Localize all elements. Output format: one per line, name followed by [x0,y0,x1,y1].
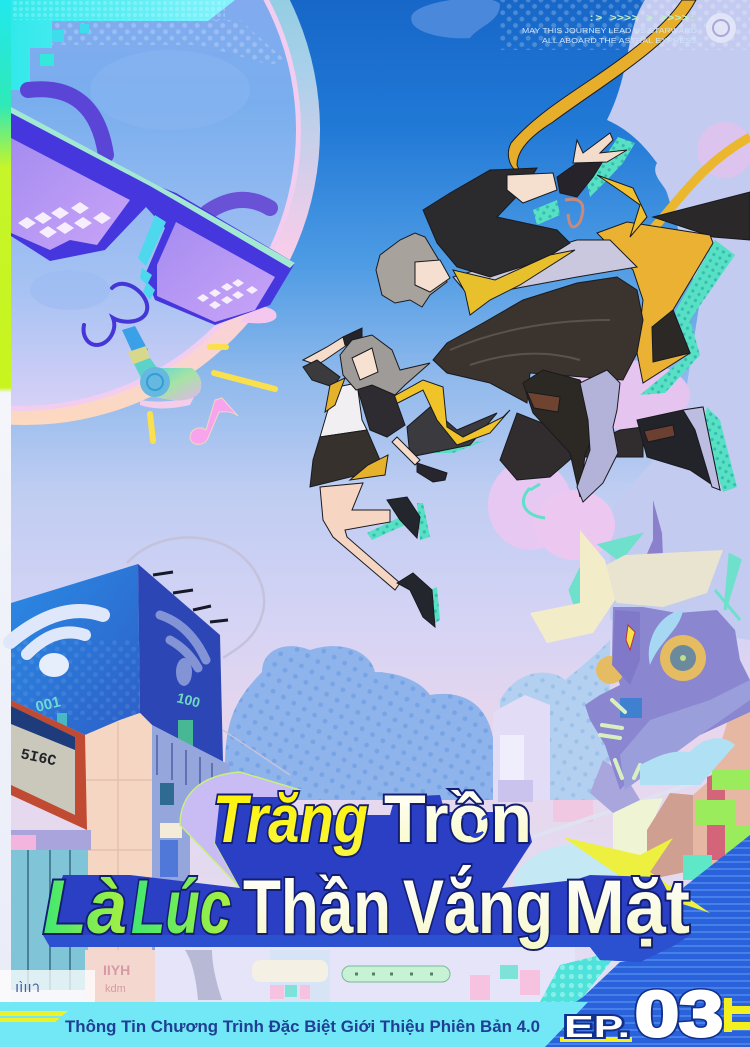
bottom-right blue panel [540,835,750,1047]
lower boot [397,573,435,627]
billboard [11,700,87,830]
pale green panel [613,798,663,880]
pixel squares [270,970,540,1000]
light blue hair [649,610,683,665]
dotted clouds [127,537,610,800]
motto line 2: ALL ABOARD THE ASTRAL EXPRESS [542,36,697,45]
glasses frame [11,108,295,325]
dragon snout [612,610,640,685]
wifi icon front [10,611,103,677]
title line 2 white [243,865,690,950]
hair and face [376,233,447,307]
raised arm [507,173,557,203]
top-right motto [522,13,736,45]
dragon body [585,607,750,790]
hair [340,335,430,395]
title line 2 white: Thần [243,865,391,950]
green bubble [342,966,450,982]
shirt [453,240,637,297]
motto line 1: MAY THIS JOURNEY LEAD US STARWARD [522,26,698,35]
lower-left shops: kdm [105,983,126,995]
pale cape right [597,550,723,607]
glove raised [343,328,362,345]
face on letter o [462,816,489,837]
character: female trailblazer [303,328,510,627]
billboard: 5I6C [19,746,58,770]
clouds: lavender and pink sky clouds [411,0,750,640]
EP label: EP. [564,1009,630,1044]
yellow stripes [0,1011,68,1022]
blue plate [43,795,690,962]
wifi icon side [160,615,206,686]
yellow accents [724,998,750,1032]
yellow jacket edge [325,378,345,412]
music note [190,398,238,444]
left lens pixels [18,202,111,238]
glasses arm left [28,89,106,155]
left lens [11,138,130,250]
glove [557,158,605,197]
title line 2 white: Mặt [564,865,690,950]
sound lines [150,347,275,441]
sleeve [303,360,340,387]
emblem [706,13,736,43]
yellow star rays [563,837,710,913]
dragon tail [590,760,640,813]
headphone right [660,635,706,681]
moon [0,0,320,425]
boot sole [577,370,620,502]
horn [640,500,663,570]
lower-left shops: ıìııา [15,979,40,996]
shirt [320,383,367,437]
teal halftone rims [367,440,487,625]
ribbon right [650,137,750,232]
top-left cyan pixel band [0,0,235,400]
fingers [573,133,627,163]
dragon mascot [530,500,750,813]
pale cape left [530,530,615,643]
skirt [310,430,383,487]
jacket [357,383,405,437]
back leg [500,413,643,480]
left margin strip [0,0,11,1047]
lower-left shops: IIYH [103,962,130,978]
title line 1 white: Trồn [384,781,532,857]
glove lower [417,463,447,482]
frame highlight [11,107,295,268]
blower body [145,368,201,400]
wifi building [10,564,228,762]
back boot [637,407,720,490]
chain [565,199,583,227]
front boot [523,370,600,497]
pixel arrows: :> >>>> > >>>>: [588,14,696,25]
green pixels [695,770,750,858]
blower stem [122,326,148,356]
pale road [533,780,703,837]
pants [433,277,643,403]
building numbers: 001 [34,693,62,716]
legs [320,483,400,590]
curled 3 [84,284,147,345]
title line 2 green: Là [43,865,127,950]
upper boot [387,497,420,538]
tall pastel tower [493,695,550,800]
right lens [157,222,275,322]
title line 2 white: Vắng [403,865,553,950]
headphone left [596,656,624,684]
yellow coat [597,222,713,383]
roof lamps [153,572,228,622]
subtitle banner [0,1002,588,1047]
subtitle: Thông Tin Chương Trình Đặc Biệt Giới Thiệu Phiên Bản 4.0 [65,1017,540,1036]
ribbon top [508,0,696,172]
teal rim [570,535,740,620]
teal halftone rims [533,137,737,492]
blue grey facade [152,725,230,950]
dark coat tail [407,407,497,457]
character: male trailblazer [376,0,750,502]
pastel city background [493,695,750,900]
cyan pixels [138,215,166,300]
title logo [43,772,710,962]
yellow scarf [387,380,510,445]
lower city pastel shops [155,945,575,1005]
sunglasses [11,89,295,325]
lower arm [392,437,420,465]
light cloud under arm [640,738,735,785]
party blower [84,284,275,444]
black coat tail [653,192,750,240]
title line 2 green: Lúc [131,865,231,950]
jacket [423,168,570,277]
black coat lower [652,310,690,362]
cyan pixel triangle [540,950,620,1033]
lilac circle behind title [180,772,300,888]
emoji bubble [252,960,328,982]
ribbon fold [597,175,647,237]
raised arm [303,337,347,365]
yellow lining [453,250,575,315]
claws [600,700,640,778]
eye [626,625,635,650]
title line 1 yellow: Trăng [213,781,368,857]
phone [620,698,642,718]
right lens pixels [197,279,258,309]
pale cloud [513,844,650,900]
title line 2 green [43,865,231,950]
front face [11,564,140,735]
side face [138,564,223,762]
glasses arm right [208,200,270,212]
peach building [693,703,750,880]
wifi building: 100 [175,689,202,711]
cream building [85,713,230,1000]
lower-left shops [0,830,155,1005]
episode label [564,978,723,1047]
brick building [647,793,695,880]
